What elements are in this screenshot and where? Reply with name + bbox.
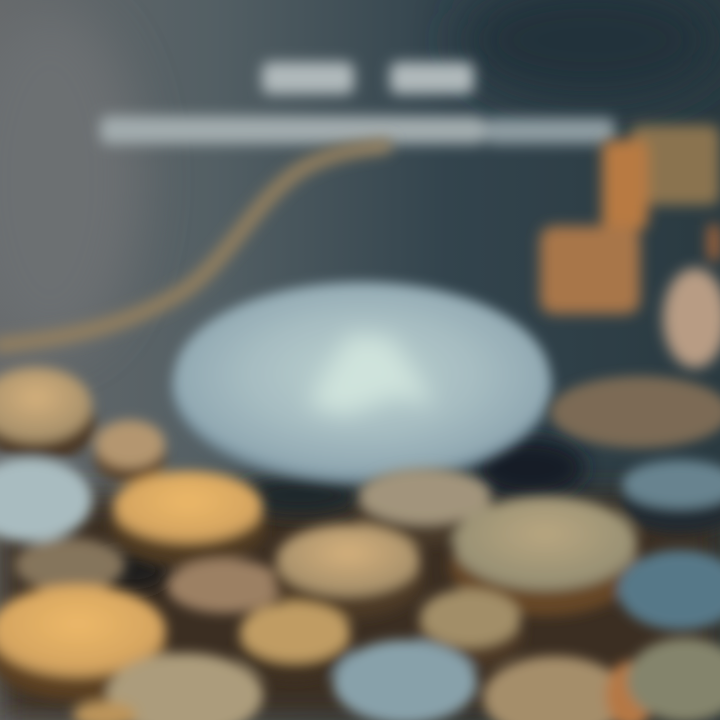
- coin: center gold left: [110, 471, 266, 566]
- coin: low mid brown: [167, 559, 283, 613]
- large silver coin: [172, 282, 552, 484]
- coin: right olive large: [450, 496, 640, 616]
- coin: bottom left gold: [73, 701, 137, 720]
- coin: upper left: [0, 367, 96, 462]
- coin: bottom right tan: [483, 656, 627, 720]
- coin: back right tan: [550, 376, 720, 448]
- coin: center gold: [273, 524, 423, 618]
- coin: bottom blue: [333, 640, 477, 720]
- coin: bottom tan: [107, 653, 263, 720]
- coin: blue right upper: [620, 460, 720, 534]
- coin: mid left small: [15, 538, 125, 592]
- coin: bottom right orange edge: [606, 661, 654, 720]
- coin: mid center tan: [357, 468, 493, 544]
- bar steps: orange blocks: [540, 125, 720, 368]
- coin: bottom right olive: [627, 638, 720, 720]
- stacked coins: [0, 367, 720, 720]
- title placeholder: illegible blurred lines: [100, 62, 615, 144]
- coin: blue right lower: [618, 550, 720, 630]
- coin: big gold lower left: [0, 585, 168, 700]
- coin: small left: [94, 420, 166, 482]
- rising price line: [0, 146, 385, 345]
- coin: silver left: [0, 458, 92, 542]
- coin: lower mid gold: [238, 602, 352, 680]
- coin: lower small tan: [417, 589, 523, 666]
